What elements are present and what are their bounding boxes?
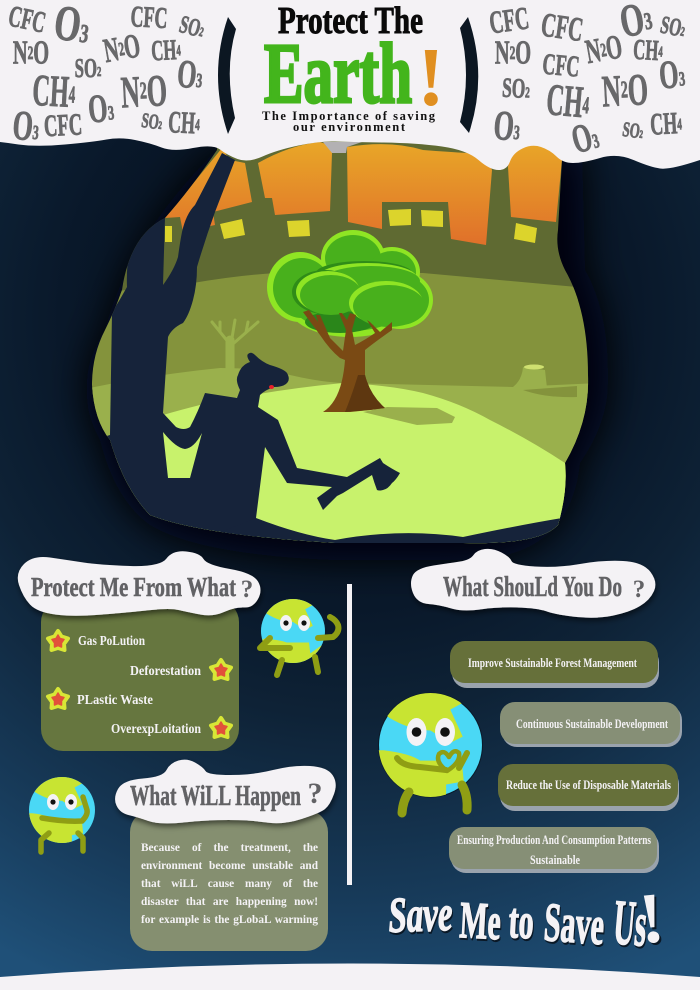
gas labels: left cluster: N2O [13, 34, 49, 72]
slogan text: Save [542, 891, 606, 956]
gas labels: right cluster: CFC [539, 6, 585, 50]
gas labels: right cluster: CH [544, 74, 585, 127]
scene shadow [86, 150, 608, 560]
gas labels: left cluster: CFC [130, 1, 168, 35]
leaf clusters [292, 261, 425, 327]
gas labels: right cluster: SO [621, 117, 642, 143]
gas labels: right cluster: 2 [639, 128, 644, 140]
closing slogan: ! [637, 879, 670, 961]
slogan text: Us [611, 886, 650, 960]
lower field [92, 368, 588, 544]
hazard: overexploitation [111, 718, 231, 737]
action: sustainable development [500, 702, 682, 747]
gas labels: right cluster: CFC [541, 48, 581, 84]
gas labels: right cluster [487, 0, 688, 163]
gas labels: left cluster: SO [176, 10, 204, 43]
hazard: plastic waste: PLastic Waste [77, 692, 153, 707]
gas labels: left cluster: 3 [78, 18, 91, 48]
gas labels: right cluster: N2O [583, 28, 625, 72]
gas labels: left cluster: N2O [101, 27, 143, 71]
gas labels: left cluster: CFC [6, 0, 48, 40]
what will happen paragraph: Because of the treatment, the [141, 842, 318, 854]
gas labels: left cluster: 4 [68, 82, 76, 108]
hazard: gas pollution [48, 631, 145, 650]
gas labels: right cluster: SO [658, 11, 684, 42]
chimney top [323, 142, 362, 153]
hazard: gas pollution: Gas PoLution [78, 633, 145, 648]
closing slogan: ! [635, 877, 668, 959]
bright ground [115, 383, 566, 544]
earth character: pointing [255, 593, 338, 675]
hazard: overexploitation: OverexpLoitation [111, 721, 201, 736]
gas labels: left cluster: SO [140, 108, 161, 134]
slogan shadow [388, 887, 651, 962]
heading cloud: what will happen [115, 760, 336, 823]
action: reduce disposable materials [498, 764, 679, 811]
title: Protect The: Protect The [278, 0, 423, 42]
faded dead tree [212, 320, 258, 372]
action: improve forest management: Improve Sustainable Forest Management [468, 655, 637, 670]
canopy body [273, 235, 429, 331]
gas labels: right cluster: SO [501, 73, 526, 105]
gas labels: left cluster: SO [75, 53, 97, 83]
hazard: deforestation [130, 660, 231, 679]
vertical divider [347, 584, 352, 885]
factory windows [165, 209, 537, 243]
gas labels: right cluster: CFC [487, 0, 531, 41]
trunk shade [345, 375, 385, 412]
gas labels: left cluster: 3 [195, 68, 203, 91]
gas labels: right cluster: N2O [601, 64, 649, 116]
panel: protect me from what [41, 600, 239, 751]
tree stump [513, 364, 577, 397]
factory skyline [118, 142, 578, 300]
gas labels: left cluster: O [175, 52, 198, 98]
gas labels: left cluster: CH4 [150, 34, 182, 68]
gas labels: right cluster: 2 [679, 25, 686, 40]
hazard: plastic waste [48, 689, 153, 708]
silhouette gap [163, 432, 202, 478]
earth character: holding heart [378, 692, 483, 818]
left bracket [218, 17, 236, 134]
red eye [269, 385, 274, 389]
action: sustainable production: Sustainable [530, 852, 580, 867]
slogan shadow: Me [459, 894, 503, 953]
middle field [92, 273, 588, 544]
gas labels: right cluster: N2O [495, 34, 531, 72]
heading cloud: what should you do: What ShouLd You Do [443, 572, 622, 603]
canopy underside [305, 311, 375, 333]
gas labels: left cluster: CH [31, 65, 70, 117]
gas labels: right cluster: CH4 [632, 34, 664, 68]
heading cloud: what should you do [411, 549, 655, 618]
bottom dark band [222, 518, 560, 544]
slogan text: Me [458, 892, 502, 951]
heading cloud: what will happen: What WiLL Happen [130, 781, 301, 812]
panel: what will happen [130, 810, 328, 951]
what will happen paragraph: environment become unstable and [141, 860, 318, 872]
central green tree [267, 230, 433, 412]
gas labels: left cluster: N2O [120, 65, 168, 117]
gas labels: left cluster: CFC [43, 106, 83, 144]
gas labels: left cluster: O [11, 101, 35, 150]
slogan shadow: Us [612, 888, 651, 962]
title: Earth: Earth [264, 25, 412, 121]
subtitle: The Importance of saving [262, 109, 436, 123]
gas labels: left cluster [6, 0, 208, 151]
bottom white band [0, 964, 700, 990]
gas labels: right cluster: O [657, 52, 680, 98]
gas labels: right cluster: O [567, 115, 597, 163]
slogan text [387, 885, 650, 960]
heading cloud: what will happen: ? [308, 777, 322, 810]
what will happen paragraph: disaster that are happening now! [141, 896, 318, 908]
gas labels: left cluster: O [86, 86, 109, 132]
gas labels: left cluster: 2 [97, 63, 101, 79]
orange sky [165, 142, 562, 245]
slogan shadow: Save [543, 893, 607, 958]
slogan shadow: to [508, 894, 536, 951]
gas labels: right cluster: 2 [525, 84, 530, 101]
heading cloud: protect me from what: ? [241, 576, 253, 603]
slogan text: Save [387, 885, 453, 943]
gas labels: right cluster: O [492, 101, 516, 150]
gas labels: right cluster: 3 [513, 120, 521, 144]
gas labels: left cluster: 3 [32, 120, 40, 144]
what will happen paragraph: that wiLL cause many of the [141, 878, 318, 890]
action: sustainable production [449, 827, 659, 873]
gas labels: right cluster: 3 [678, 66, 686, 90]
heading cloud: protect me from what: Protect Me From What [31, 572, 236, 602]
top white cloud band [0, 0, 700, 170]
hazard: deforestation: Deforestation [130, 663, 201, 678]
gas labels: left cluster: 2 [158, 119, 163, 131]
slogan shadow: Save [388, 887, 454, 945]
canopy outline [267, 230, 433, 337]
closing slogan [387, 877, 670, 962]
gas labels: left cluster: 3 [107, 100, 115, 124]
right bracket [460, 17, 478, 133]
gas labels: right cluster: CH4 [649, 106, 683, 142]
gas labels: right cluster: 3 [642, 8, 654, 35]
what will happen paragraph: for example is the gLobaL warming [141, 914, 318, 926]
illustration: deforestation scene [92, 142, 588, 544]
action: improve forest management [450, 641, 659, 688]
subtitle: our environment [293, 120, 406, 134]
earth character: thinking [29, 777, 95, 855]
gas labels: left cluster: 2 [197, 25, 205, 40]
gas labels: left cluster: CH4 [167, 105, 201, 141]
gas labels: right cluster: 3 [590, 129, 602, 152]
trunk [303, 310, 392, 412]
gas labels: right cluster: 4 [582, 92, 590, 119]
heading cloud: what should you do: ? [633, 576, 645, 603]
subtitle [262, 109, 436, 134]
tree shadow [363, 407, 455, 425]
slogan text: to [507, 892, 535, 949]
what will happen paragraph [141, 842, 318, 926]
heading cloud: protect me from what [18, 551, 261, 616]
heart [438, 751, 459, 771]
exclamation mark: ! [417, 31, 445, 124]
silhouette: tree and woodcutter with axe [100, 153, 400, 560]
